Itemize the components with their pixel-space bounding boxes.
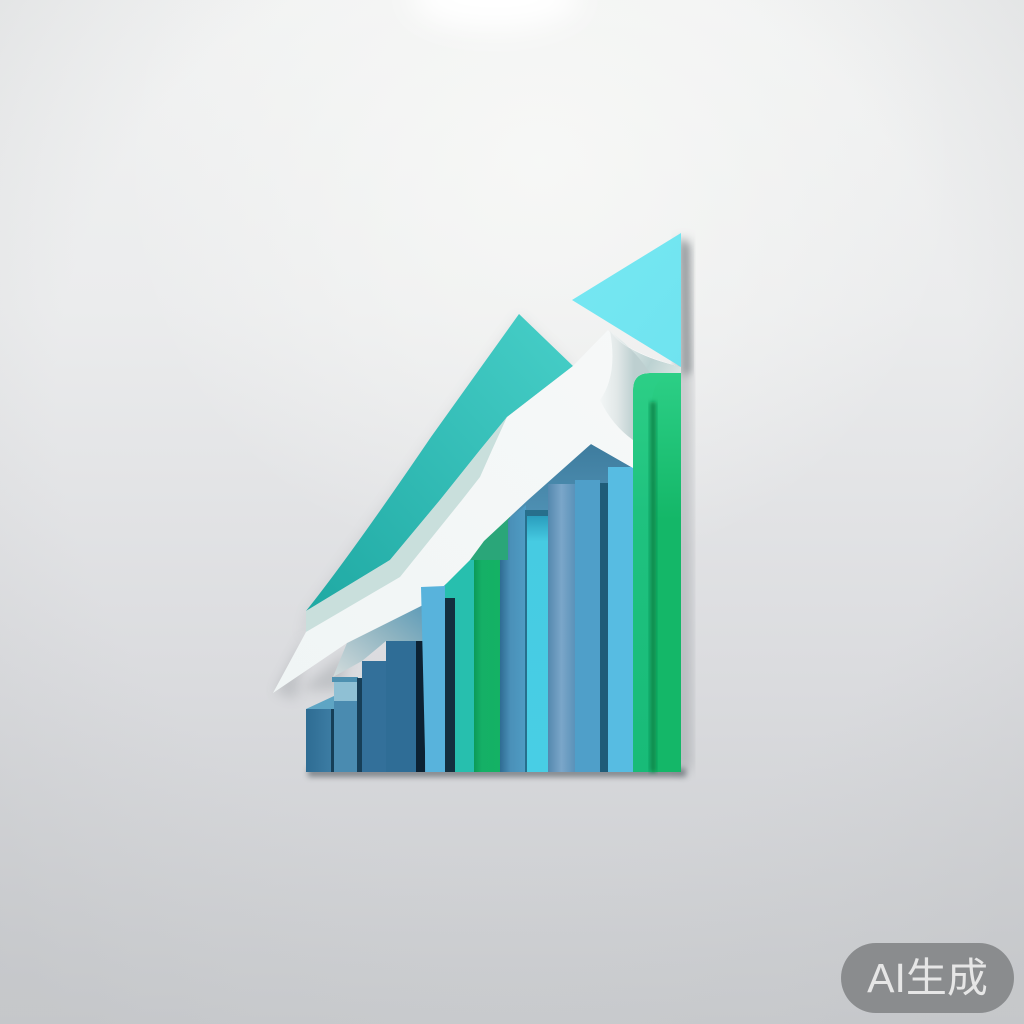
shaded fold face	[600, 331, 681, 440]
pale band under teal shard	[306, 417, 530, 632]
bar 13	[633, 373, 681, 772]
curl lip below arrowhead	[610, 331, 681, 373]
bar backing	[425, 444, 633, 772]
teal shard	[306, 314, 573, 611]
badge: AI生成: AI生成	[867, 955, 988, 1001]
bar 8	[500, 505, 526, 772]
bar 12	[608, 467, 633, 772]
bar 5 gap	[445, 598, 455, 772]
shaded underside of white arrow	[333, 605, 423, 677]
drop shadows	[275, 238, 691, 777]
bar 9	[525, 510, 549, 772]
bar 4	[386, 641, 425, 772]
bar 10	[548, 484, 575, 772]
bar 6	[445, 558, 474, 772]
bar 14	[650, 376, 681, 772]
bar 7	[470, 515, 510, 772]
arrow body	[273, 330, 681, 693]
white arrow	[273, 330, 681, 693]
arrowhead	[572, 233, 681, 367]
bar 3	[362, 661, 387, 772]
badge: AI生成	[841, 943, 1014, 1013]
bar chart	[306, 373, 681, 772]
bar 1	[306, 696, 334, 772]
bar 11	[575, 480, 600, 772]
bar 5	[421, 586, 445, 772]
bar 2	[332, 677, 363, 772]
